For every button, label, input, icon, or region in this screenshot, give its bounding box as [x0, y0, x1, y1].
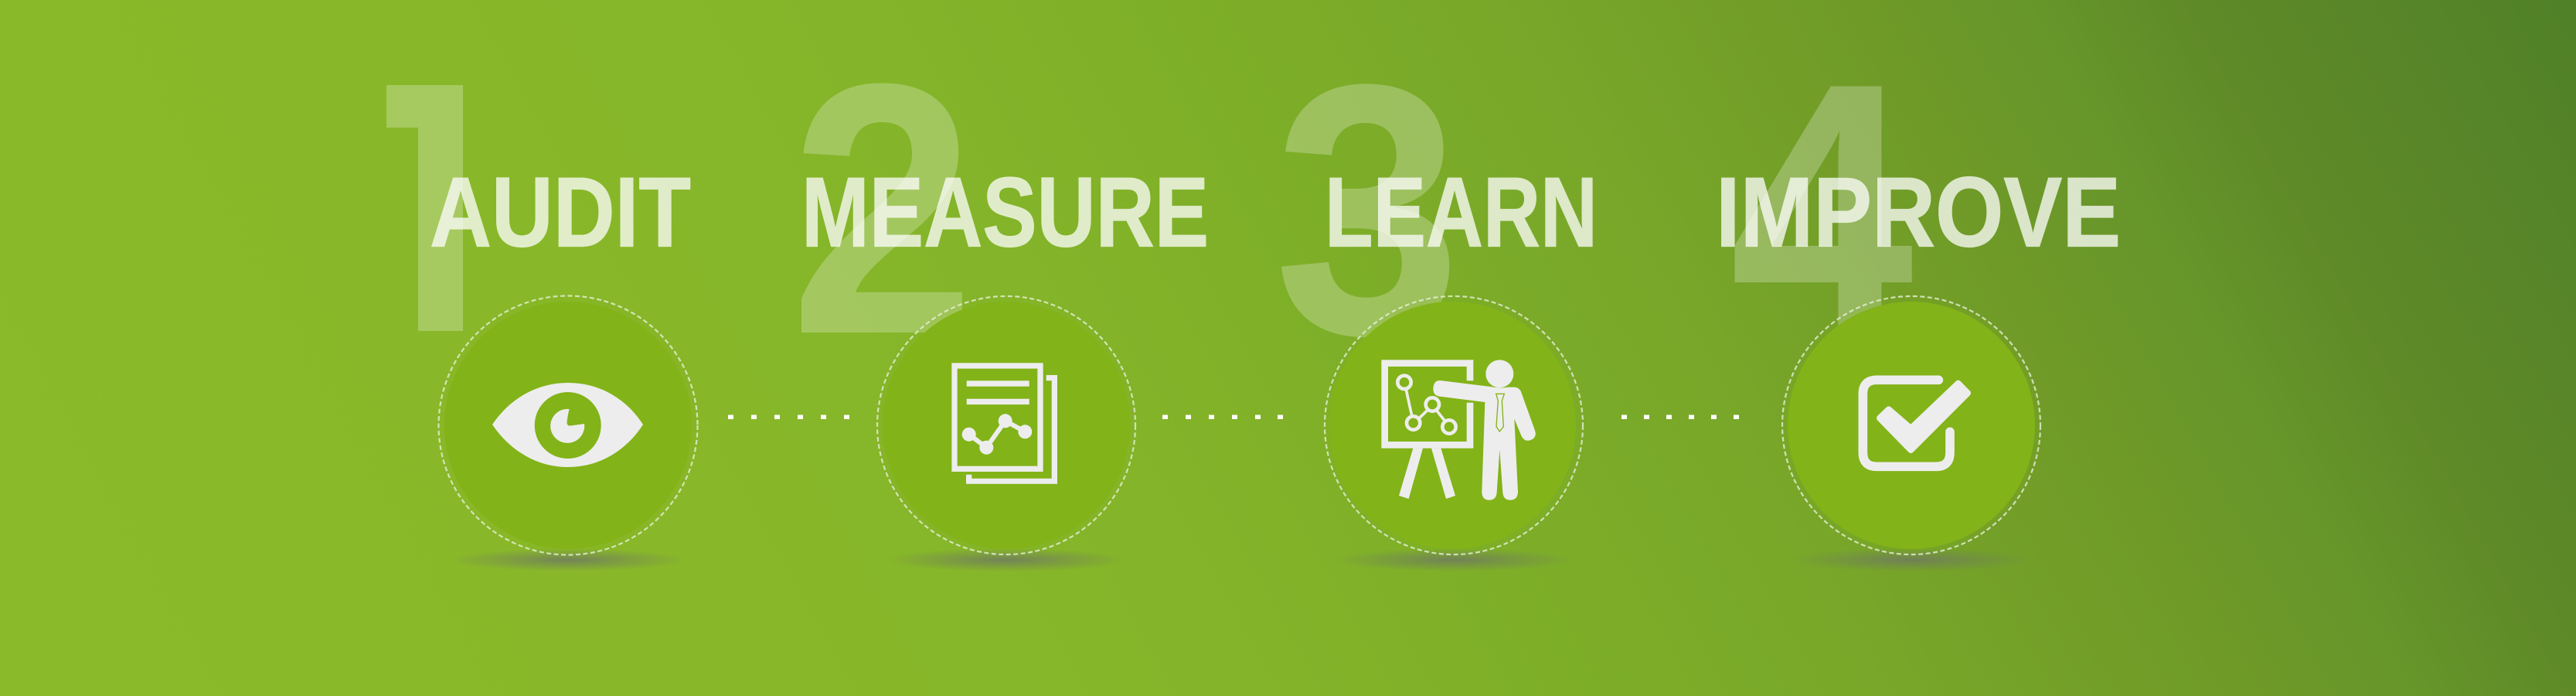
heading: measure: MEASURE: [801, 158, 1209, 268]
icon: presenter at easel: [1385, 360, 1536, 500]
icon: report document with chart: [955, 366, 1057, 484]
connector dots 2: [1162, 415, 1283, 419]
icon: eye: [492, 383, 643, 467]
number 1: 1: [340, 17, 533, 405]
number 2: 2: [790, 9, 975, 408]
icon: checkbox with tick: [1863, 380, 1968, 466]
number 1: [386, 85, 463, 331]
circle 2: [877, 296, 1135, 554]
shadow under circle 3: [1333, 548, 1574, 571]
connector dots 1: [728, 415, 849, 419]
heading: improve: IMPROVE: [1716, 158, 2121, 268]
shadow under circle 4: [1791, 548, 2032, 571]
circle 3: [1325, 296, 1583, 554]
circle 4: [1782, 296, 2040, 554]
heading: audit: AUDIT: [430, 158, 691, 268]
number 4: 4: [1730, 9, 1916, 409]
shadow under circle 1: [447, 548, 689, 571]
circle 1: [439, 295, 697, 555]
shadow under circle 2: [886, 548, 1127, 571]
number 3: 3: [1274, 10, 1462, 409]
connector dots 3: [1621, 415, 1739, 419]
heading: learn: LEARN: [1325, 158, 1598, 268]
